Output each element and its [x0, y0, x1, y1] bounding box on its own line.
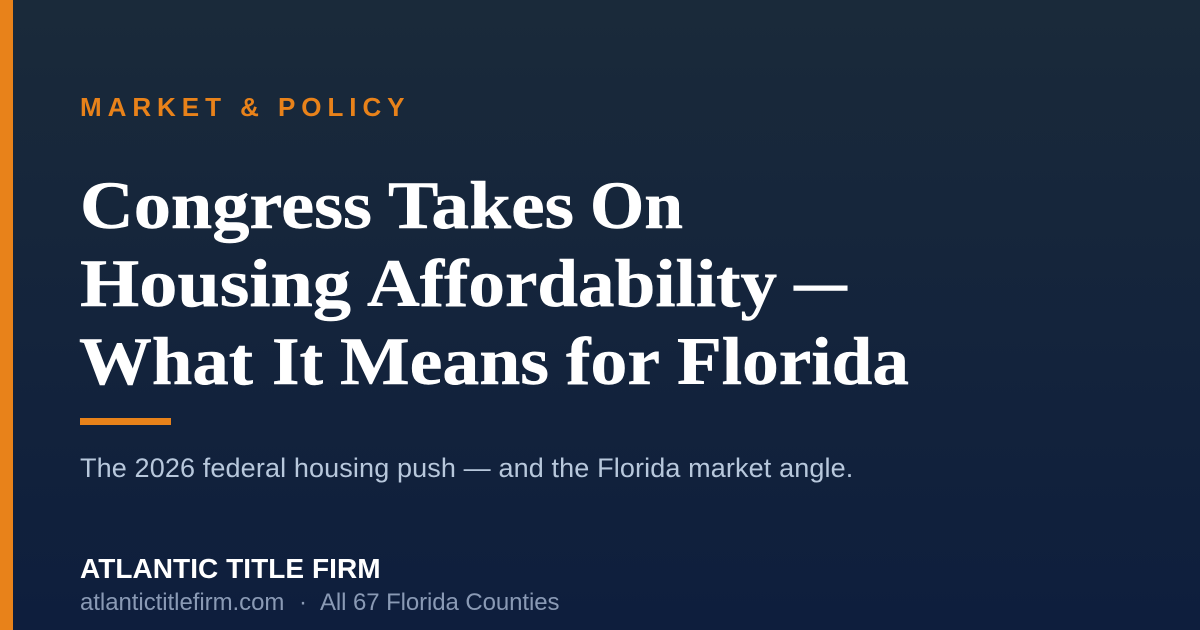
- website and coverage: ·: [299, 589, 307, 616]
- title: —: [793, 243, 848, 319]
- title: It: [272, 323, 323, 399]
- accent bar: [0, 0, 13, 630]
- title: What: [79, 323, 253, 399]
- title: Congress: [80, 167, 372, 243]
- title: [79, 167, 909, 399]
- title: Means: [340, 323, 549, 399]
- firm name: ATLANTIC TITLE FIRM: [80, 553, 381, 584]
- title: for: [566, 323, 660, 399]
- subtitle: The 2026 federal housing push — and the Florida market angle.: [80, 453, 853, 483]
- title: Housing: [80, 245, 351, 321]
- title: Florida: [677, 323, 909, 399]
- title: Affordability: [367, 245, 777, 321]
- website and coverage: atlantictitlefirm.com: [80, 589, 284, 616]
- website and coverage: [80, 589, 559, 616]
- title: Takes: [388, 167, 574, 243]
- website and coverage: All 67 Florida Counties: [320, 589, 559, 616]
- title: On: [590, 167, 683, 243]
- divider rule: [80, 418, 171, 425]
- eyebrow label: MARKET & POLICY: [80, 92, 410, 122]
